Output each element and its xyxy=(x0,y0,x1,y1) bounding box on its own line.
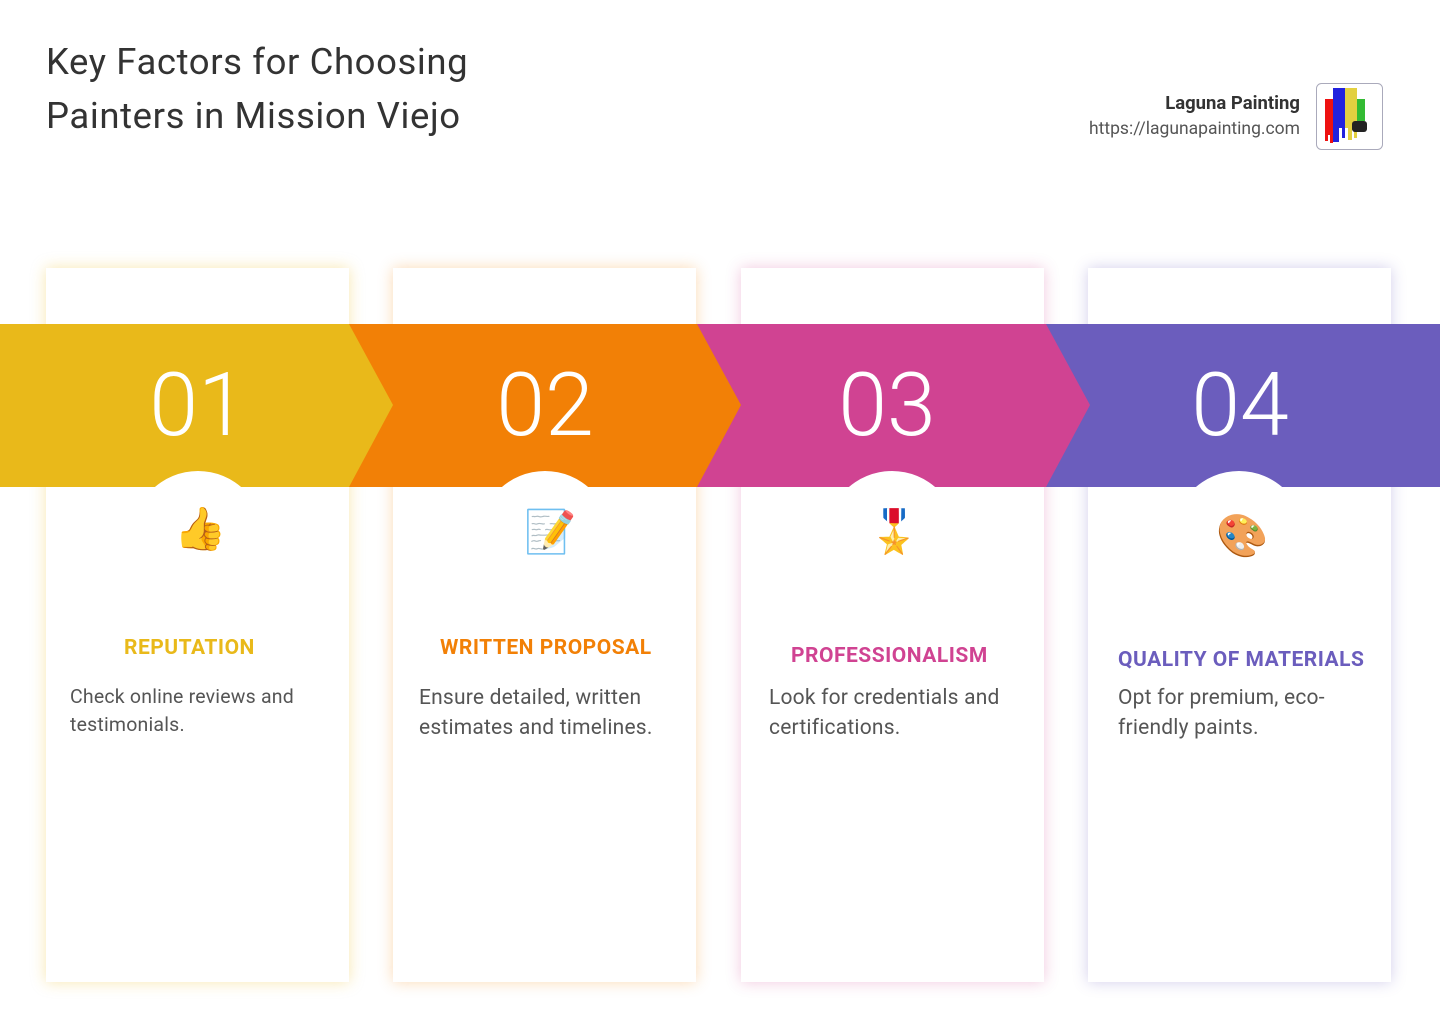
text: Opt for premium, eco- xyxy=(1118,686,1325,710)
card 2 text: WRITTEN PROPOSAL xyxy=(440,636,652,660)
arrow band: 02 xyxy=(496,354,594,457)
text: testimonials. xyxy=(70,713,185,736)
arrow band: 01 xyxy=(149,354,247,457)
logo xyxy=(1316,83,1383,150)
brand: https://lagunapainting.com xyxy=(1089,119,1300,139)
arrow band: 04 xyxy=(1191,354,1289,457)
cards xyxy=(46,268,349,982)
card 1 text: REPUTATION xyxy=(124,636,255,660)
brand: Laguna Painting xyxy=(1165,92,1300,114)
text: Check online reviews and xyxy=(70,685,294,708)
text: Look for credentials and xyxy=(769,686,1000,710)
text: certifications. xyxy=(769,716,900,740)
text: estimates and timelines. xyxy=(419,716,653,740)
text: Ensure detailed, written xyxy=(419,686,641,710)
title: Key Factors for Choosing xyxy=(46,40,468,83)
text: 🎨 xyxy=(1216,512,1268,561)
text: 🎖 xyxy=(868,508,920,557)
arrow band xyxy=(0,324,1440,487)
text: 📝 xyxy=(524,508,576,557)
card 3 text: PROFESSIONALISM xyxy=(791,644,988,668)
text: friendly paints. xyxy=(1118,716,1259,740)
brand xyxy=(1089,83,1383,150)
icons: 👍 xyxy=(174,505,226,554)
card 4 text: QUALITY OF MATERIALS xyxy=(1118,648,1364,672)
title: Painters in Mission Viejo xyxy=(46,94,461,137)
title xyxy=(46,40,468,137)
arrow band: 03 xyxy=(838,354,936,457)
